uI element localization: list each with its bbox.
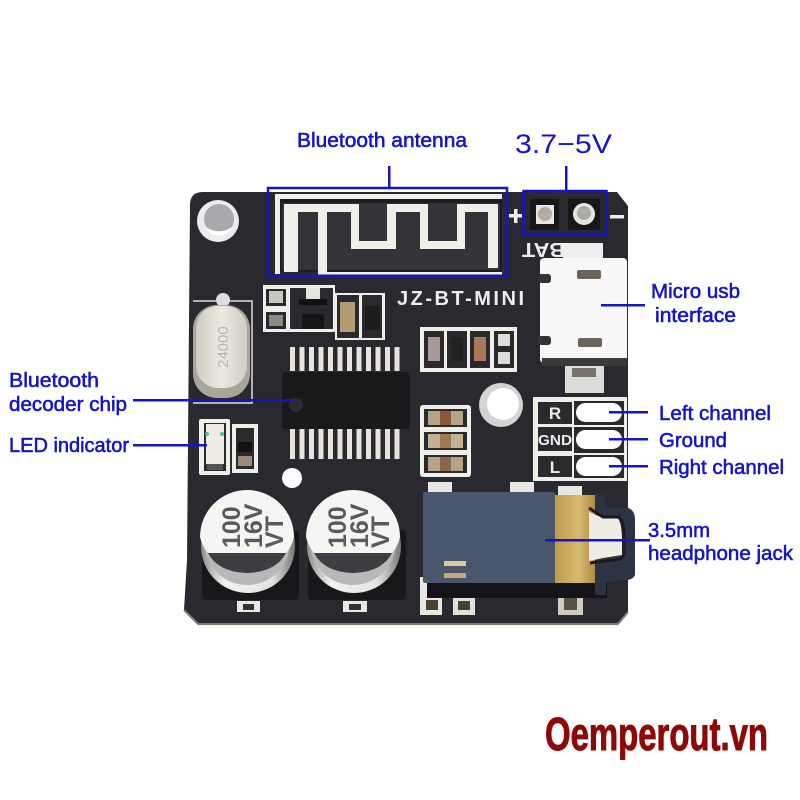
callout: LED indicator: LED indicator: [9, 435, 129, 457]
callout: Bluetooth decoder chip: [9, 370, 293, 416]
callout: micro USB interface: Micro usb: [651, 281, 740, 303]
electrolytic capacitor 2: VT: [367, 516, 395, 548]
top SMD components: [263, 285, 385, 340]
callout: Ground: [609, 430, 727, 452]
circuit board: [184, 192, 635, 624]
electrolytic capacitor 1: 100: [218, 506, 246, 548]
decoder chip with pins: [282, 347, 410, 459]
callout: Bluetooth antenna: Bluetooth antenna: [297, 130, 468, 152]
small through hole: [282, 468, 302, 488]
LED indicator: [199, 419, 258, 475]
callout: headphone jack: headphone jack: [648, 543, 794, 565]
audio output pads: L: [550, 458, 560, 477]
crystal oscillator: [193, 293, 252, 403]
board name silkscreen: JZ-BT-MINI: [397, 288, 524, 310]
electrolytic capacitor 2: 16V: [346, 503, 374, 548]
electrolytic capacitor 1: VT: [261, 516, 289, 548]
electrolytic capacitor 2: 100: [324, 506, 352, 548]
middle SMD components: [420, 327, 517, 372]
callout: Bluetooth decoder chip: decoder chip: [9, 394, 127, 416]
right SMD capacitors: [420, 405, 471, 477]
callout: voltage: 3.7−5V: [515, 129, 612, 159]
callout: headphone jack: 3.5mm: [648, 520, 710, 542]
electrolytic capacitor 2: [306, 490, 401, 593]
plus and minus marks: [509, 209, 624, 223]
footprints under capacitors: [202, 530, 406, 612]
BAT silkscreen: BAT: [522, 238, 565, 260]
audio output pads: [533, 397, 627, 481]
callout: micro USB interface: [601, 281, 740, 327]
audio output pads: GND: [538, 432, 572, 449]
callout: micro USB interface: interface: [655, 305, 736, 327]
callout: Right channel: Right channel: [659, 457, 784, 479]
center mounting hole: [479, 383, 523, 427]
micro USB connector: [538, 243, 627, 393]
mounting hole: [197, 200, 239, 242]
callout: Bluetooth decoder chip: Bluetooth: [9, 370, 99, 392]
headphone jack: [420, 482, 635, 615]
callout: headphone jack: [545, 520, 794, 565]
audio output pads: R: [549, 404, 561, 423]
electrolytic capacitor 1: [200, 490, 295, 593]
antenna trace: [275, 194, 502, 274]
crystal oscillator: 24000: [215, 326, 232, 368]
callout: Bluetooth antenna: [268, 130, 507, 276]
callout: Ground: Ground: [659, 430, 727, 452]
solder pads for power: [530, 199, 600, 230]
callout: voltage: [515, 129, 612, 234]
callout: Left channel: Left channel: [659, 403, 771, 425]
electrolytic capacitor 1: 16V: [240, 503, 268, 548]
